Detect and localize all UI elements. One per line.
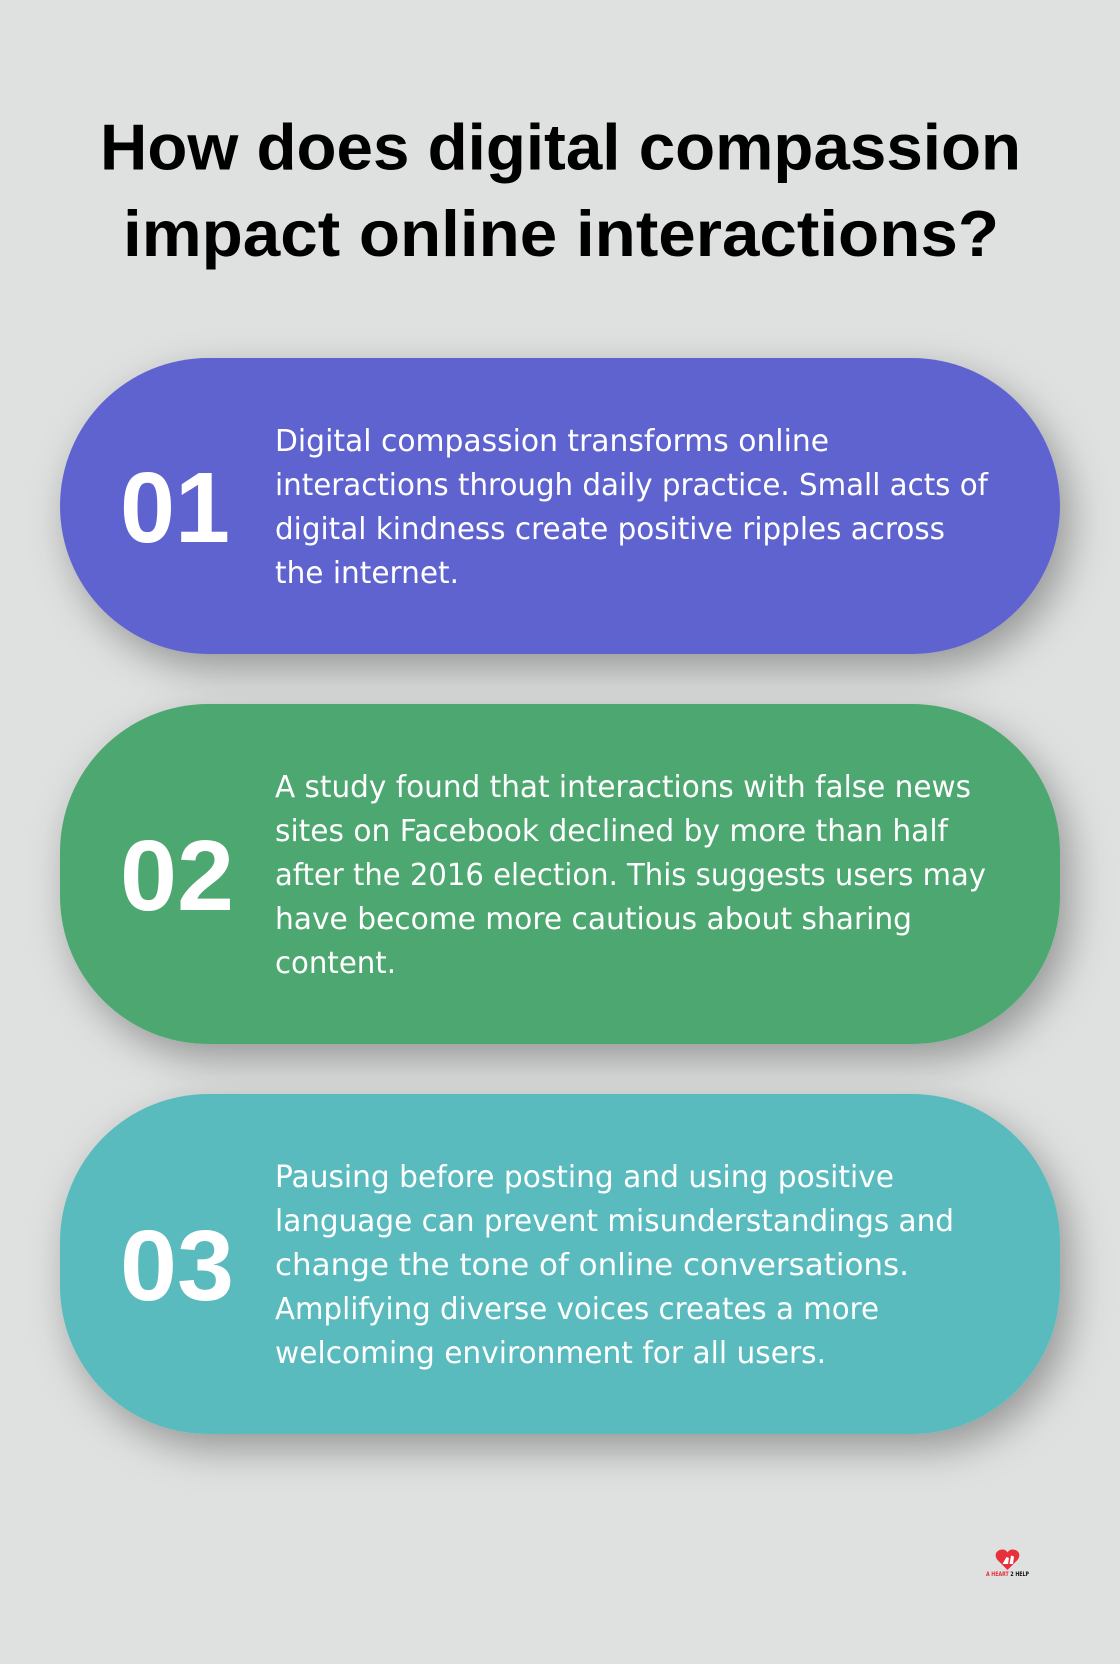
text block 01: the internet. bbox=[275, 556, 459, 591]
pill background 03 bbox=[60, 1094, 1060, 1434]
text block 01 bbox=[275, 424, 989, 591]
text block 03: Amplifying diverse voices creates a more bbox=[275, 1292, 879, 1327]
text block 01: digital kindness create positive ripples across bbox=[275, 512, 945, 547]
pill background 02 bbox=[60, 704, 1060, 1044]
text block 03: Pausing before posting and using positive bbox=[275, 1160, 894, 1195]
text block 03: welcoming environment for all users. bbox=[275, 1336, 826, 1371]
text block 03: language can prevent misunderstandings and bbox=[275, 1204, 954, 1239]
pill background 01 bbox=[60, 358, 1060, 654]
text block 02: sites on Facebook declined by more than half bbox=[275, 814, 949, 849]
text block 02 bbox=[275, 770, 986, 981]
text block 02: content. bbox=[275, 946, 396, 981]
logo wordmark: A HEART 2 HELP bbox=[986, 1570, 1029, 1578]
text block 03: change the tone of online conversations. bbox=[275, 1248, 909, 1283]
number 02: 02 bbox=[120, 820, 234, 932]
number 01: 01 bbox=[120, 452, 230, 564]
icon: heart with hands bbox=[996, 1550, 1019, 1570]
panel: step 02 bbox=[60, 704, 1060, 1044]
panel: step 01 bbox=[60, 358, 1060, 654]
text block 03 bbox=[275, 1160, 954, 1371]
number 03: 03 bbox=[120, 1210, 234, 1322]
title: How does digital compassion bbox=[100, 110, 1021, 184]
title: impact online interactions? bbox=[123, 197, 999, 270]
text block 01: Digital compassion transforms online bbox=[275, 424, 829, 459]
text block 02: after the 2016 election. This suggests users may bbox=[275, 858, 986, 893]
panel: step 03 bbox=[60, 1094, 1060, 1434]
text block 01: interactions through daily practice. Small acts of bbox=[275, 468, 989, 503]
text block 02: have become more cautious about sharing bbox=[275, 902, 912, 937]
logo: A Heart 2 Help bbox=[986, 1550, 1029, 1578]
text block 02: A study found that interactions with false news bbox=[275, 770, 971, 805]
title bbox=[100, 110, 1021, 270]
